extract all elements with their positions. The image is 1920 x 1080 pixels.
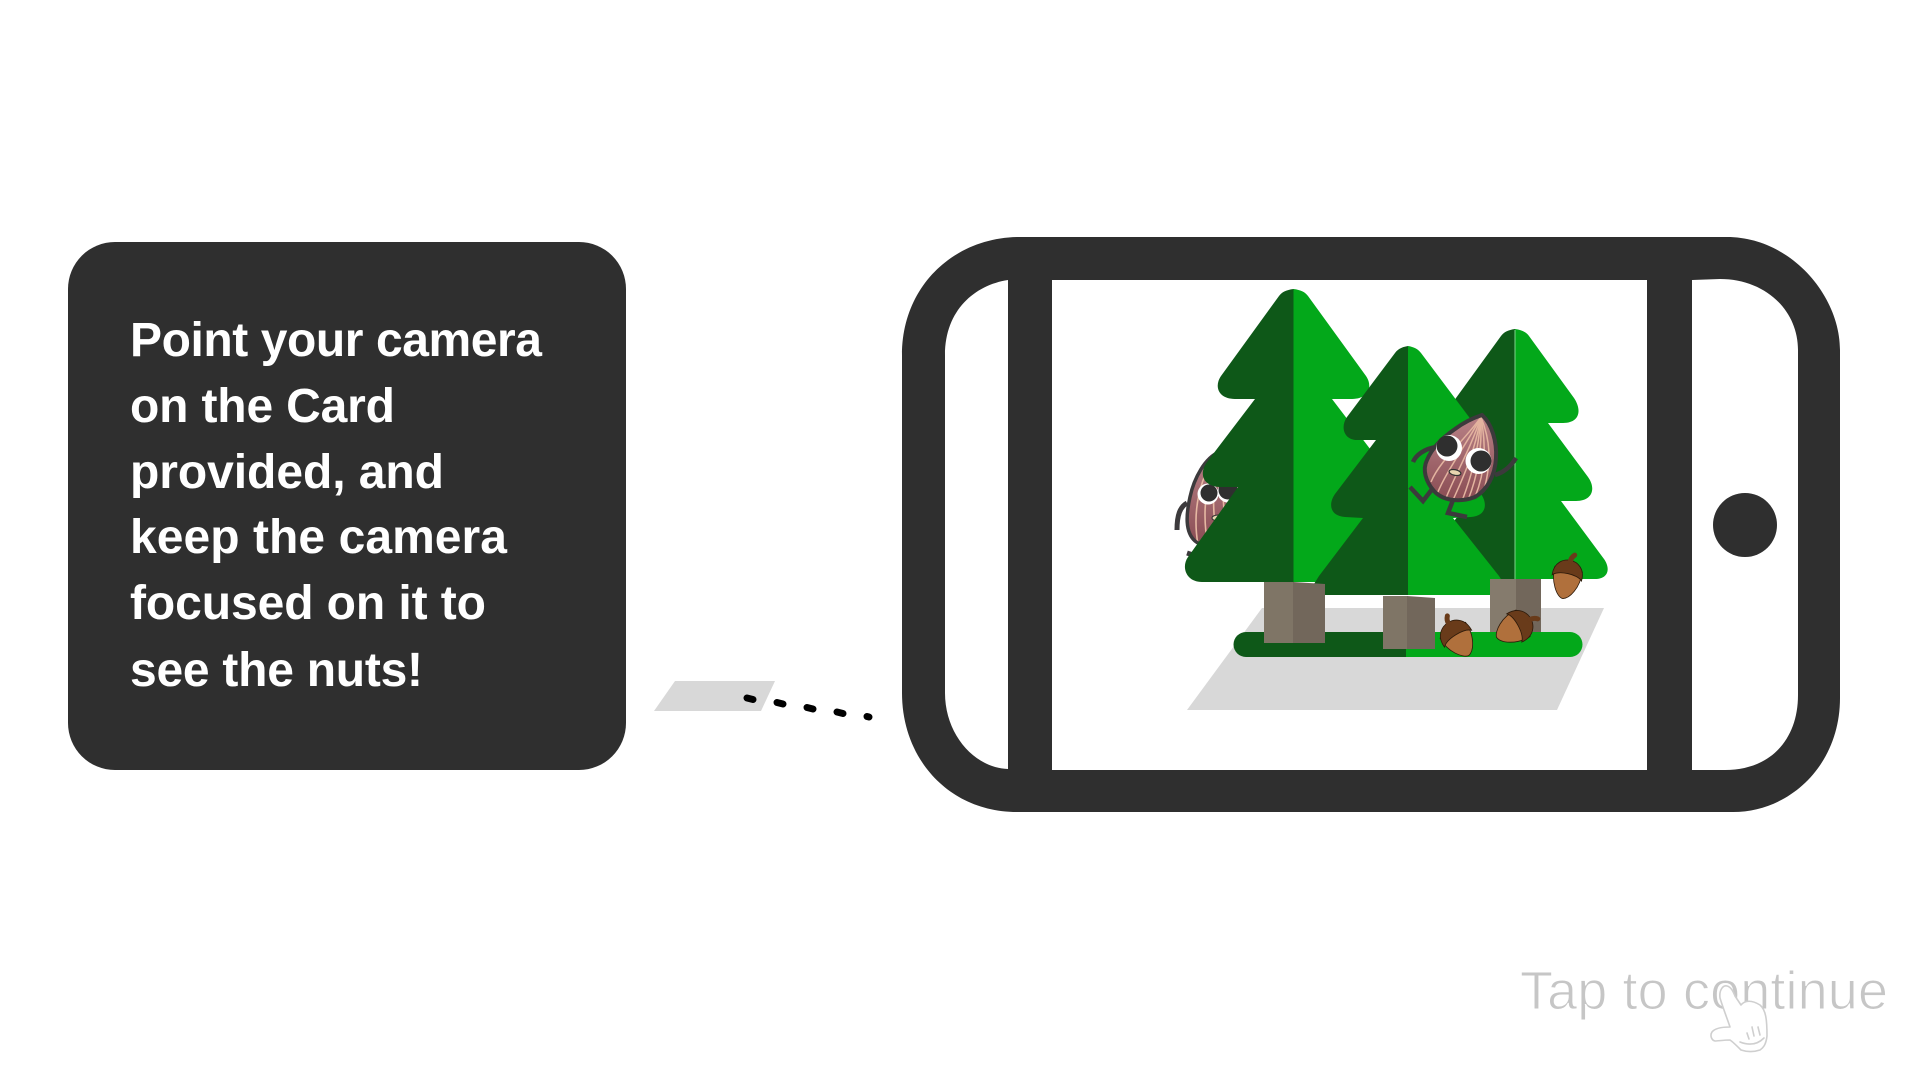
- AR scene: [1177, 289, 1608, 710]
- acorn: on ground left: [1431, 609, 1482, 664]
- tap to continue text: Tap to continue: [1520, 961, 1888, 1021]
- instruction text: focused on it to: [130, 577, 486, 630]
- tree: right: [1422, 329, 1608, 579]
- instruction text: on the Card: [130, 380, 395, 433]
- phone button: [1713, 493, 1777, 557]
- dotted line to phone: [747, 698, 869, 717]
- trunk: right: [1490, 579, 1541, 632]
- phone frame: [902, 237, 1840, 812]
- instruction text: provided, and: [130, 446, 444, 499]
- trunk: left: [1264, 582, 1325, 643]
- instruction text: keep the camera: [130, 511, 507, 564]
- acorn: falling: [1548, 551, 1587, 602]
- acorn: on ground right: [1489, 602, 1544, 652]
- ground card: [1187, 608, 1604, 710]
- tree: middle: [1311, 346, 1507, 595]
- instruction text: Point your camera: [130, 314, 542, 367]
- instruction card: [68, 242, 626, 770]
- icon: pointing hand: [1711, 986, 1767, 1052]
- tree: left: [1185, 289, 1402, 582]
- ground bar: [1234, 632, 1582, 657]
- character: almond running: [1410, 415, 1516, 517]
- instruction text: [130, 314, 542, 697]
- card on table: [654, 681, 775, 711]
- character: almond hiding behind tree: [1177, 452, 1245, 557]
- instruction text: see the nuts!: [130, 644, 423, 697]
- trunk: middle: [1383, 596, 1435, 649]
